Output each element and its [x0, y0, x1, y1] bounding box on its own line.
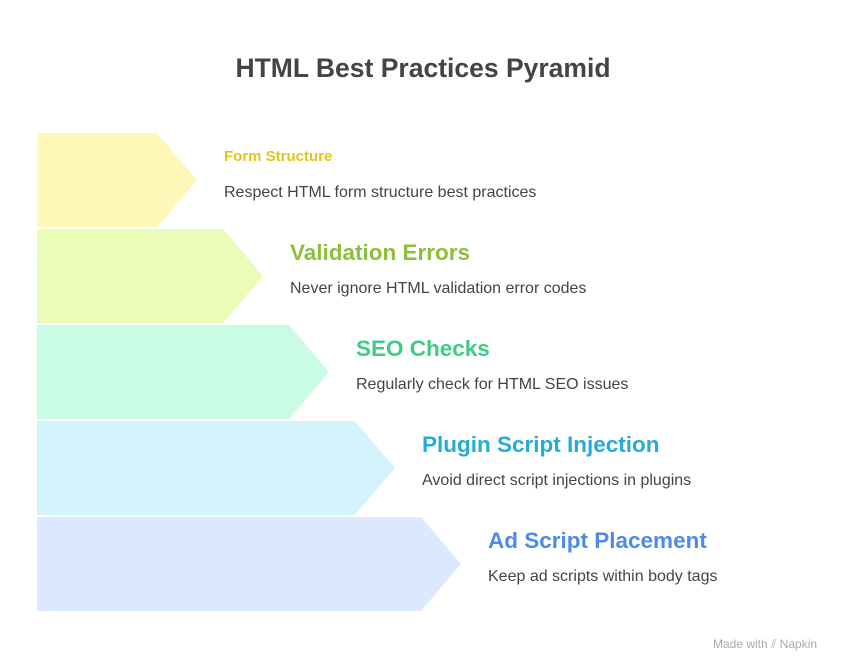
- text: validation: Never ignore HTML validation error codes: [290, 280, 586, 297]
- text: seo: Regularly check for HTML SEO issues: [356, 376, 628, 393]
- heading: ad script placement: Ad Script Placement: [488, 528, 707, 553]
- text: form structure: Respect HTML form structure best practices: [224, 184, 536, 201]
- layer 1 shape: [37, 133, 197, 227]
- title: HTML Best Practices Pyramid: [235, 53, 611, 83]
- layer 4 shape: [37, 421, 395, 515]
- heading: form structure: Form Structure: [224, 148, 332, 165]
- text: plugin: Avoid direct script injections in plugins: [422, 472, 691, 489]
- heading: plugin script injection: Plugin Script Injection: [422, 432, 660, 457]
- layer 2 shape: [37, 229, 263, 323]
- layer 5 shape: [37, 517, 461, 611]
- text: ad: Keep ad scripts within body tags: [488, 568, 717, 585]
- heading: validation errors: Validation Errors: [290, 240, 470, 265]
- heading: seo checks: SEO Checks: [356, 336, 490, 361]
- layer 3 shape: [37, 325, 329, 419]
- footer credit: Made with ⫽ Napkin: [713, 637, 817, 651]
